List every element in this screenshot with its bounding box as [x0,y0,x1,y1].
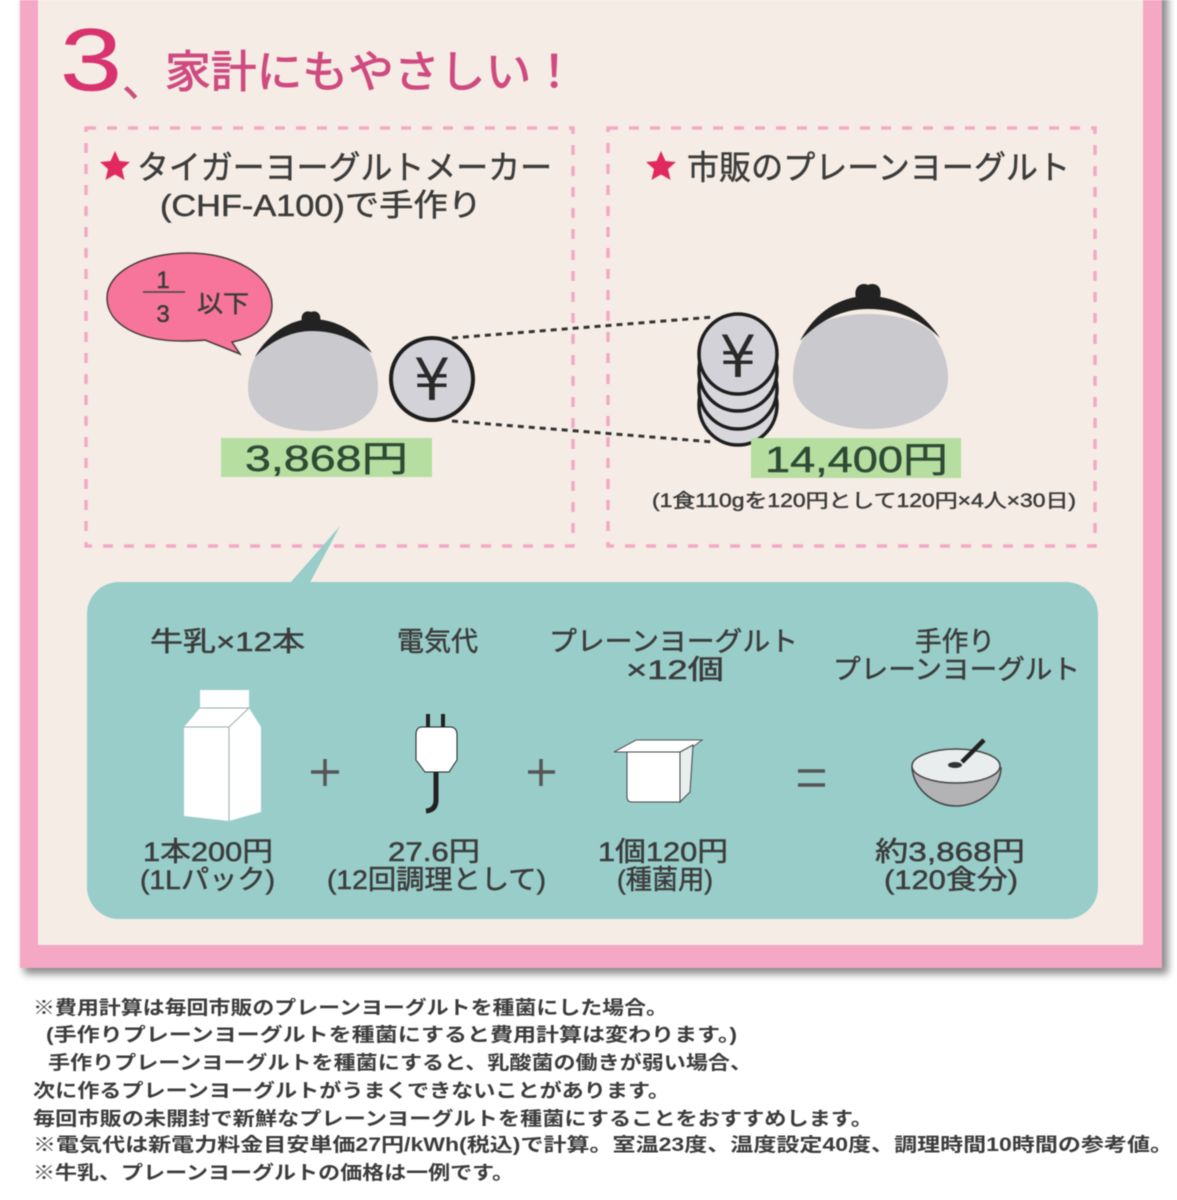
icon: large purse [793,284,948,429]
icon: coin stack [699,314,777,445]
item: plain yogurt: (種菌用) [617,865,713,895]
price label: 3,868 yen [221,438,432,479]
icon: yen coin [391,338,473,420]
callout: one third or less: 1 [156,267,170,294]
item: electricity: 電気代 [397,627,478,657]
callout: one third or less: 以下 [197,291,249,318]
footnotes [33,996,1173,1184]
footnotes: ※電気代は新電力料金目安単価27円/kWh(税込)で計算。室温23度、温度設定40度、調理時間10時間の参考値。 [33,1133,1173,1156]
callout pointer [284,526,340,590]
panel: cost breakdown [87,526,1098,919]
callout: one third or less: 3 [156,301,170,328]
footnotes: 次に作るプレーンヨーグルトがうまくできないことがあります。 [33,1079,670,1102]
arrow: dotted comparison lines [452,317,714,442]
footnotes: 手作りプレーンヨーグルトを種菌にすると、乳酸菌の働きが弱い場合、 [48,1051,752,1074]
footnotes: 毎回市販の未開封で新鮮なプレーンヨーグルトを種菌にすることをおすすめします。 [33,1107,873,1130]
item: homemade yogurt [833,627,1080,895]
operator: plus [311,759,339,786]
item: plain yogurt: 1個120円 [598,837,728,867]
footnotes: ※牛乳、プレーンヨーグルトの価格は一例です。 [33,1161,514,1184]
icon: yen coin: ¥ [414,346,450,414]
footnotes: ※費用計算は毎回市販のプレーンヨーグルトを種菌にした場合。 [33,996,668,1019]
panel: pink framed background [20,0,1168,974]
icon: small purse [248,311,378,431]
icon: yogurt cup [614,740,702,802]
operator: equals [798,771,825,785]
icon: coin stack: ¥ [720,323,756,391]
price label: 14,400 yen: 14,400円 [765,439,948,480]
title: 家計にもやさしい！ [165,48,577,97]
item: milk: 牛乳×12本 [150,627,305,657]
price label: 14,400 yen [751,438,961,480]
title: 3 [60,10,122,109]
callout: one third or less [107,253,272,354]
item: homemade yogurt: プレーンヨーグルト [833,655,1080,685]
item: plain yogurt: プレーンヨーグルト [549,627,798,657]
icon: plug [416,714,457,811]
panel: tiger yogurt maker [86,128,573,546]
price note: (1食110gを120円として120円×4人×30日) [652,490,1076,512]
item: milk: 1本200円 [143,837,273,867]
item: homemade yogurt: 手作り [915,627,995,657]
operator: plus [528,759,555,786]
icon: bowl [912,740,1001,806]
icon: milk carton [184,690,261,821]
heading: tiger maker: (CHF-A100)で手作り [160,188,482,223]
item: homemade yogurt: 約3,868円 [875,837,1025,867]
heading: store-bought: 市販のプレーンヨーグルト [687,149,1070,186]
item: electricity [327,627,546,895]
item: plain yogurt [549,627,798,895]
title [60,10,577,109]
heading: tiger maker [137,149,552,223]
item: milk: (1Lパック) [140,865,275,895]
item: plain yogurt: ×12個 [626,655,724,685]
title: 、 [122,57,166,106]
footnotes: (手作りプレーンヨーグルトを種菌にすると費用計算は変わります。) [46,1023,737,1046]
item: electricity: 27.6円 [388,837,480,867]
heading: tiger maker: タイガーヨーグルトメーカー [137,149,552,186]
icon: star [100,151,130,180]
item: electricity: (12回調理として) [327,865,546,895]
panel: store-bought yogurt [608,128,1095,546]
icon: star [646,151,676,180]
item: homemade yogurt: (120食分) [884,865,1018,895]
item: milk [140,627,305,895]
price label: 3,868 yen: 3,868円 [245,438,408,479]
